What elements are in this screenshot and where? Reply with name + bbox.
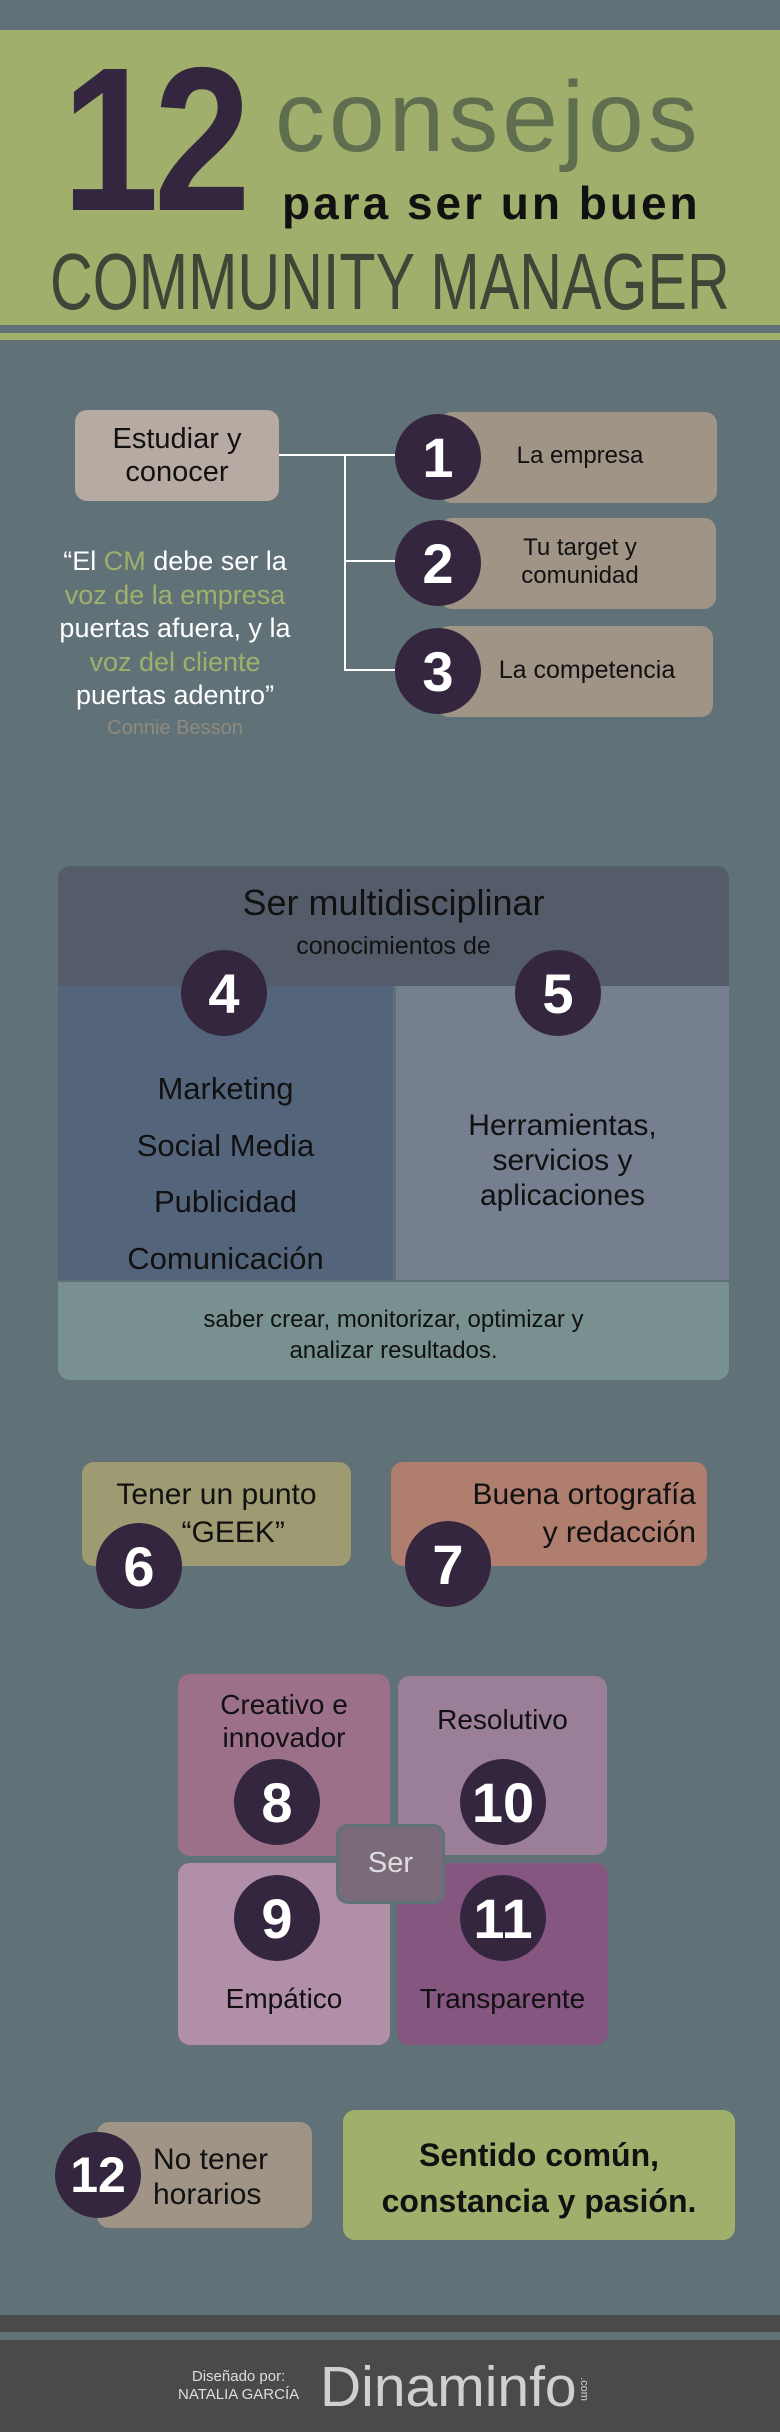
section: estudiar y conocer — [75, 410, 717, 717]
footer — [0, 2315, 780, 2432]
tip 7: y redacción — [543, 1516, 696, 1549]
box 8 — [178, 1674, 390, 1856]
box 10 — [398, 1676, 607, 1855]
item 3: La competencia — [499, 656, 675, 684]
bottom box: saber crear, monitorizar, optimizar y — [203, 1306, 584, 1333]
box 8: innovador — [222, 1722, 345, 1753]
box: estudiar y conocer — [75, 410, 279, 501]
number 4: 4 — [208, 962, 240, 1024]
quote — [59, 546, 291, 738]
right box 5: aplicaciones — [480, 1179, 645, 1212]
quote: voz del cliente — [89, 646, 261, 676]
box 9: 9 — [261, 1886, 293, 1950]
box 11 — [397, 1863, 608, 2045]
item 1: La empresa — [517, 442, 643, 469]
right box 5: servicios y — [492, 1144, 633, 1177]
tip 7: Buena ortografía — [472, 1478, 696, 1511]
left box 4: Marketing — [157, 1071, 294, 1106]
box 8: 8 — [261, 1770, 293, 1834]
right box 5 — [396, 986, 729, 1280]
quote: puertas afuera, y la — [59, 613, 291, 643]
header: conocimientos de — [296, 932, 491, 960]
closing box: constancia y pasión. — [382, 2183, 696, 2219]
right box 5: Herramientas, — [468, 1109, 657, 1142]
item 2: Tu target y — [523, 534, 637, 561]
header: Ser multidisciplinar — [242, 882, 545, 923]
left box 4: Publicidad — [154, 1184, 297, 1219]
tip 12: No tener — [153, 2143, 268, 2176]
number 4 — [181, 950, 267, 1036]
left box 4: Comunicación — [127, 1240, 324, 1276]
number 5: 5 — [542, 962, 574, 1024]
closing box — [343, 2110, 735, 2240]
tip 6: Tener un punto — [116, 1478, 317, 1511]
title COMMUNITY MANAGER: COMMUNITY MANAGER — [50, 237, 730, 326]
tip 7: 7 — [432, 1532, 464, 1596]
box 10: Resolutivo — [437, 1704, 568, 1735]
footer: .com — [578, 2377, 590, 2401]
logo: Dinaminfo — [320, 2355, 577, 2419]
bottom box — [58, 1282, 729, 1380]
quote: voz de la empresa — [65, 580, 285, 610]
tip 6: “GEEK” — [181, 1516, 285, 1549]
tip 6: 6 — [123, 1534, 155, 1598]
item 1 — [395, 412, 717, 503]
item 2: 2 — [422, 532, 454, 594]
box 10: 10 — [472, 1770, 534, 1834]
panel: multidisciplinar — [58, 866, 729, 1380]
quote: puertas adentro” — [76, 680, 274, 710]
box 9: Empático — [226, 1983, 342, 2014]
box 8: Creativo e — [220, 1689, 348, 1720]
box: estudiar y conocer: conocer — [125, 456, 229, 488]
quote: “El CM debe ser la — [63, 546, 287, 576]
connector lines — [279, 454, 395, 671]
tip 12: horarios — [153, 2178, 261, 2211]
credit: Diseñado por: — [192, 2368, 285, 2385]
box 11: 11 — [473, 1886, 533, 1950]
item 3 — [395, 626, 713, 717]
credit — [178, 2368, 299, 2403]
closing box: Sentido común, — [419, 2137, 659, 2173]
box 11: Transparente — [420, 1983, 585, 2014]
item 1: 1 — [422, 426, 454, 488]
header banner — [0, 30, 780, 340]
tip 12 — [55, 2122, 312, 2228]
tip 12: 12 — [70, 2147, 126, 2203]
left box 4: Social Media — [137, 1128, 314, 1162]
box 9 — [178, 1863, 390, 2045]
tip 7 — [391, 1462, 707, 1607]
ser grid — [178, 1674, 608, 2045]
item 2 — [395, 518, 716, 609]
item 2: comunidad — [521, 562, 639, 589]
box: estudiar y conocer: Estudiar y — [113, 423, 241, 455]
subtitle: para ser un buen — [282, 177, 701, 229]
bottom box: analizar resultados. — [289, 1337, 498, 1364]
center Ser: Ser — [368, 1847, 413, 1879]
tip 6 — [82, 1462, 351, 1609]
number 5 — [515, 950, 601, 1036]
left box 4 — [58, 986, 393, 1280]
center Ser — [336, 1824, 445, 1904]
title number 12: 12 — [62, 30, 246, 254]
quote: Connie Besson — [107, 716, 243, 738]
credit: NATALIA GARCÍA — [178, 2386, 299, 2403]
item 3: 3 — [422, 640, 454, 702]
title word consejos: consejos — [275, 61, 702, 173]
header — [58, 866, 729, 986]
